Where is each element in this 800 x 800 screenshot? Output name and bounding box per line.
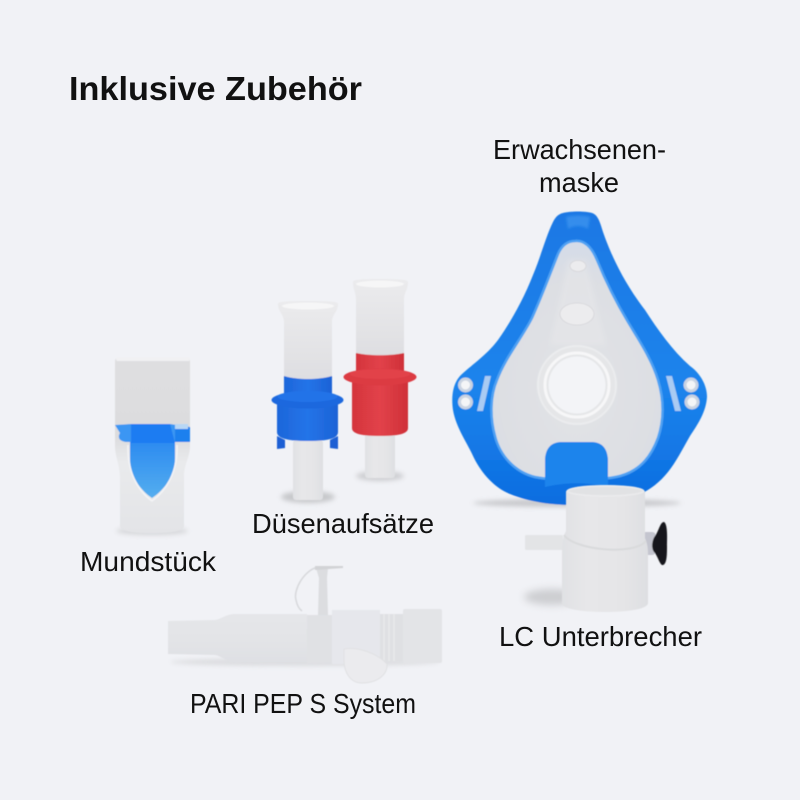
mouthpiece blue tongue xyxy=(130,440,175,498)
blue nozzle collar xyxy=(284,376,332,396)
red nozzle rim xyxy=(356,280,404,288)
PEP tether loop xyxy=(296,567,318,611)
title: Inklusive Zubehör xyxy=(69,70,362,107)
PEP collar xyxy=(307,615,333,663)
label: Erwachsenenmaske: maske xyxy=(539,167,619,198)
mask centre vertical sheen xyxy=(550,260,606,345)
mouthpiece body xyxy=(115,357,190,533)
icon: mouthpiece xyxy=(115,357,190,535)
interrupter body xyxy=(562,485,648,612)
interrupter side spout xyxy=(525,535,563,550)
mask left strap holes xyxy=(460,379,472,408)
mask blue rim xyxy=(452,212,707,505)
PEP tether tab xyxy=(315,566,343,570)
mouthpiece rim xyxy=(116,357,190,361)
mouthpiece white edge xyxy=(128,445,177,501)
blue nozzle flange xyxy=(272,392,344,408)
interrupter knob stem xyxy=(642,532,656,555)
blue nozzle rim xyxy=(282,302,334,310)
PEP end cap xyxy=(403,609,442,663)
label: LC Unterbrecher: LC Unterbrecher xyxy=(499,621,702,652)
blue nozzle skirt xyxy=(277,402,338,441)
label: PARI PEP S System: PARI PEP S System xyxy=(190,688,416,719)
PEP mouth tube xyxy=(168,614,307,662)
icon: blue nozzle attachment xyxy=(272,301,344,503)
mask translucent inner shell xyxy=(491,241,662,480)
icon: LC interrupter xyxy=(524,485,667,612)
mask bottom tab xyxy=(545,442,608,487)
blue nozzle stem xyxy=(293,440,323,500)
PEP valve housing xyxy=(332,610,380,664)
PEP stopper stem xyxy=(316,568,328,615)
mask logo emblems xyxy=(560,260,594,325)
red nozzle collar xyxy=(356,353,404,374)
interrupter top opening xyxy=(568,486,644,496)
red nozzle clear cup xyxy=(353,279,408,358)
label: Düsenaufsätze: Düsenaufsätze xyxy=(252,508,434,539)
red nozzle skirt xyxy=(352,380,408,436)
mask right strap holes xyxy=(685,379,698,408)
mask ring and centre opening xyxy=(538,346,616,424)
PEP flap xyxy=(344,648,387,683)
interrupter black disc xyxy=(652,522,667,565)
mask top highlight xyxy=(566,216,590,229)
label: Mundstück: Mundstück xyxy=(80,546,217,577)
mask side stripes xyxy=(477,376,681,411)
mouthpiece blue band xyxy=(115,424,190,442)
label: Erwachsenenmaske: Erwachsenen- xyxy=(493,134,666,165)
icon: adult mask xyxy=(452,212,707,507)
icon: PARI PEP S system xyxy=(168,566,442,683)
interrupter shoulder shade xyxy=(564,535,646,550)
PEP threaded section xyxy=(380,614,403,661)
blue nozzle feet xyxy=(277,436,338,449)
icon: red nozzle attachment xyxy=(344,279,416,481)
red nozzle flange xyxy=(344,368,416,386)
blue nozzle clear cup xyxy=(278,301,338,380)
red nozzle stem xyxy=(365,430,395,478)
